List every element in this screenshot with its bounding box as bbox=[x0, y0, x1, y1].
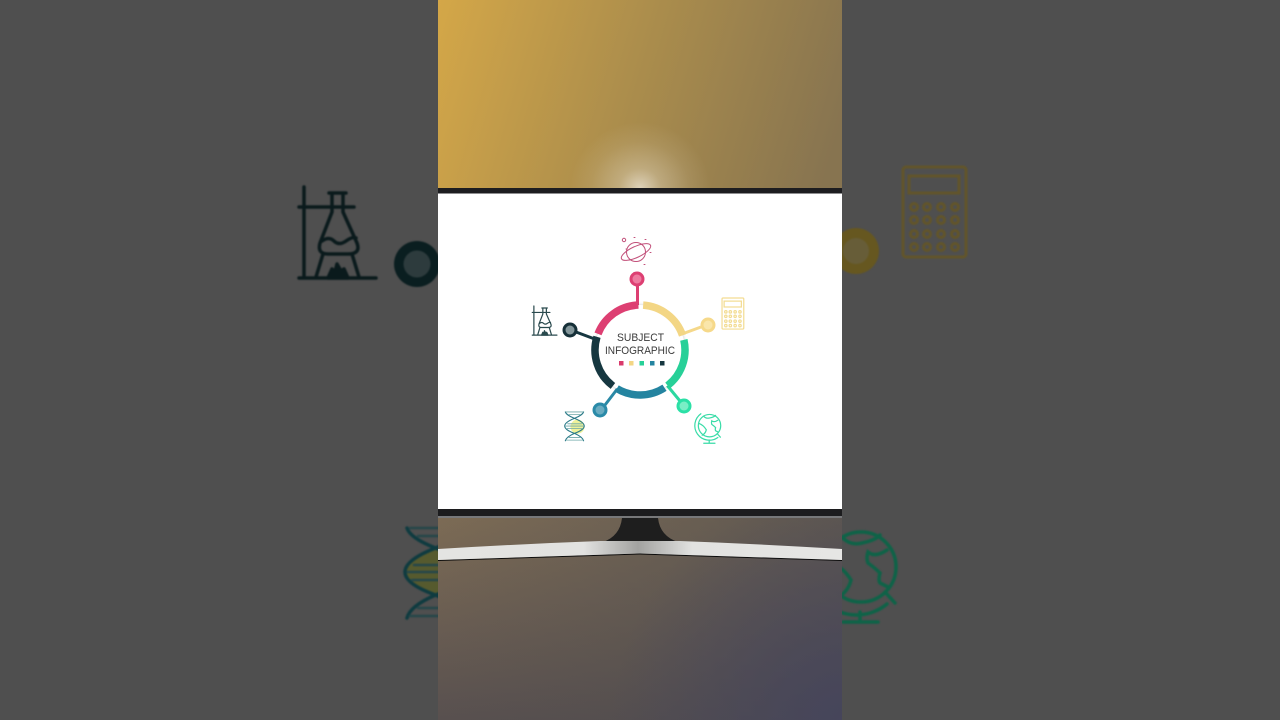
icon: planet bbox=[619, 238, 653, 264]
ring segment: pink bbox=[598, 305, 638, 334]
monitor: top bezel bbox=[438, 188, 842, 194]
connector: pink bbox=[636, 285, 639, 306]
centre disc bbox=[595, 305, 685, 395]
node: yellow bbox=[700, 318, 716, 332]
background icon: large DNA helix bbox=[405, 528, 470, 618]
icon: calculator bbox=[722, 298, 744, 329]
background icon: large yellow node bbox=[833, 228, 879, 274]
ring segment: blue bbox=[617, 388, 665, 395]
photo backdrop: top wall bbox=[438, 0, 842, 190]
connector: blue bbox=[605, 388, 618, 405]
background icon: large calculator bbox=[903, 167, 966, 257]
background icon: large dark node bbox=[394, 241, 440, 287]
node: green bbox=[676, 398, 692, 414]
ring segment: dark bbox=[595, 337, 613, 386]
photo backdrop: lower wall bbox=[438, 510, 842, 720]
icon: flask bbox=[532, 306, 557, 335]
colour key squares bbox=[619, 361, 664, 366]
title: subject infographic: INFOGRAPHIC bbox=[605, 345, 675, 357]
node: pink bbox=[630, 272, 644, 286]
node: dark bbox=[562, 322, 578, 338]
background icon: large globe bbox=[809, 530, 896, 622]
monitor: stand neck bbox=[603, 518, 678, 542]
infographic: hub diagram bbox=[532, 238, 744, 443]
ring segment: green bbox=[668, 340, 685, 386]
connector: yellow bbox=[682, 327, 701, 334]
connector: dark bbox=[576, 332, 600, 341]
monitor: white screen bbox=[438, 194, 842, 510]
node: blue bbox=[592, 402, 608, 418]
monitor: bottom bezel bbox=[438, 509, 842, 518]
ring segment: yellow bbox=[643, 305, 683, 335]
connector: green bbox=[666, 384, 680, 401]
monitor: stand base bbox=[438, 541, 842, 561]
icon: DNA helix bbox=[565, 412, 585, 441]
background icon: large flask bbox=[299, 187, 376, 278]
icon: globe bbox=[695, 414, 721, 443]
title: subject infographic bbox=[605, 332, 675, 357]
title: subject infographic: SUBJECT bbox=[617, 332, 664, 344]
